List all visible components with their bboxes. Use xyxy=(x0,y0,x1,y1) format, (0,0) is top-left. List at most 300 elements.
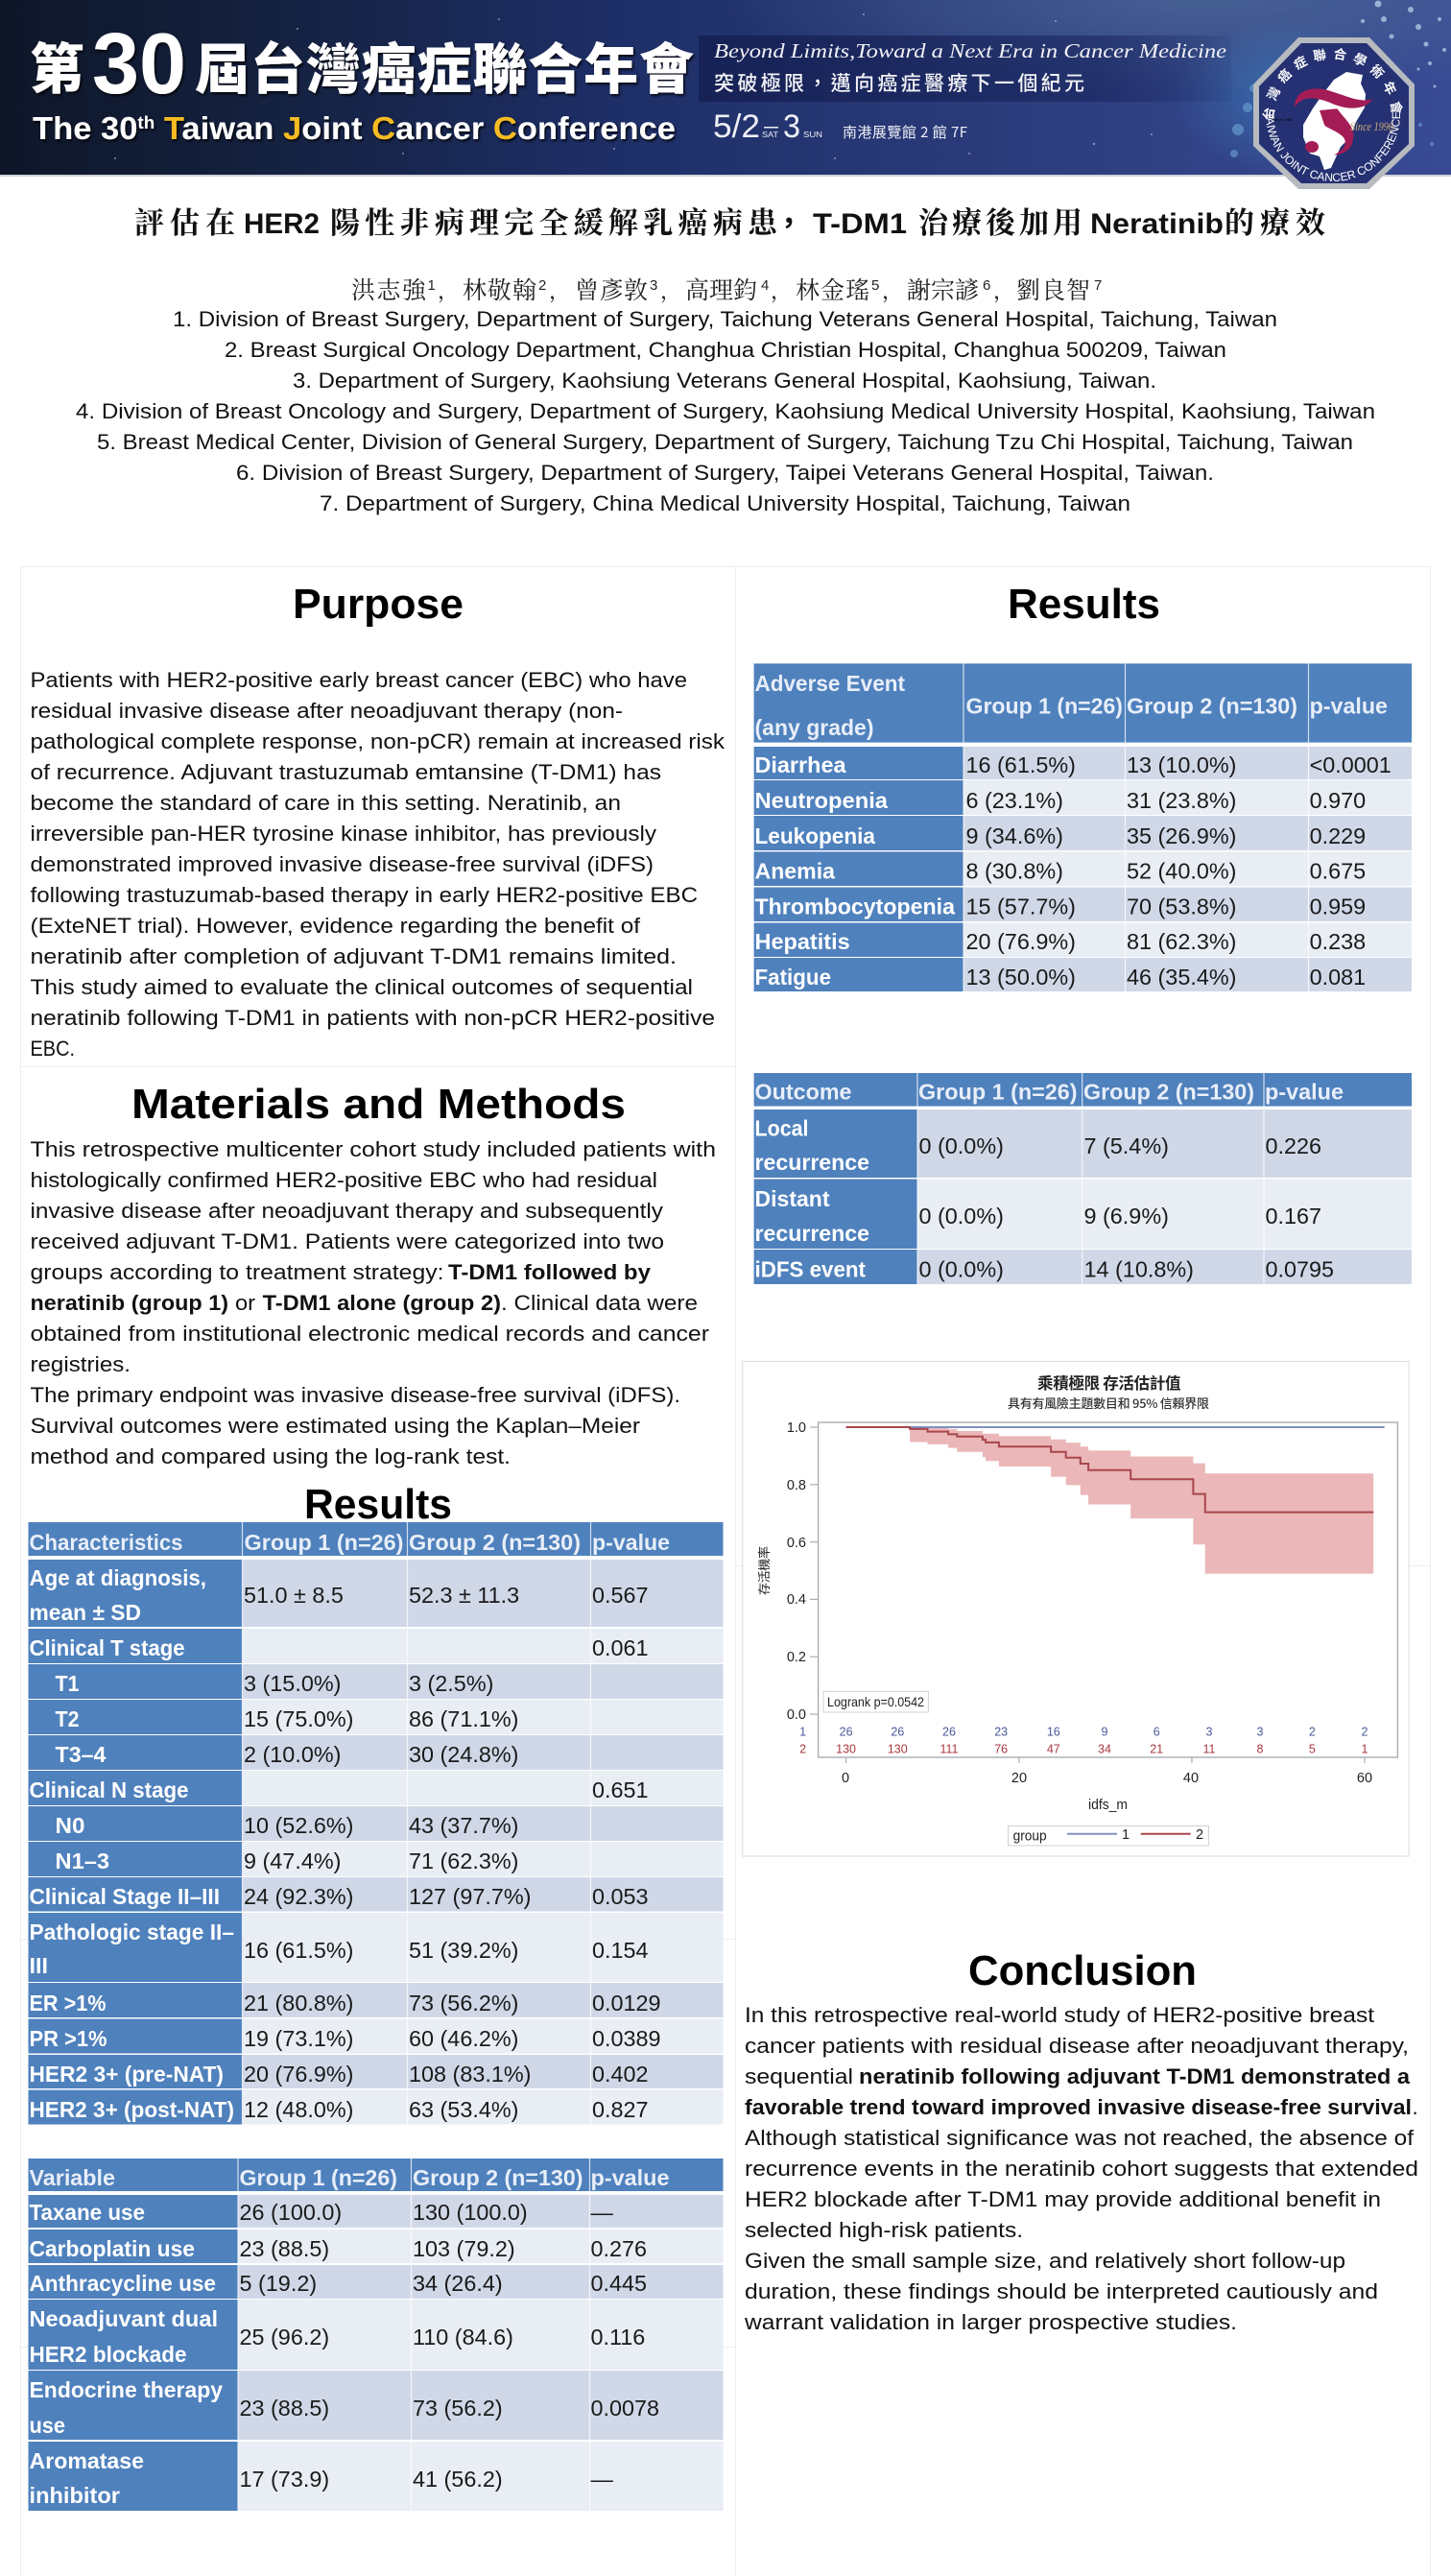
date and venue: SUN xyxy=(803,130,822,139)
number at risk: group 2: 47 xyxy=(1047,1743,1060,1756)
table: baseline characteristics: Age at diagnosis, xyxy=(29,1565,206,1590)
table: treatment variables: Neoadjuvant dual xyxy=(29,2306,218,2331)
number at risk: group 1: 2 xyxy=(1362,1726,1368,1739)
plot axes: 0.4 xyxy=(787,1592,806,1608)
table: outcomes: Group 1 (n=26) xyxy=(918,1079,1078,1104)
table: treatment variables: Variable xyxy=(29,2165,115,2190)
number at risk: group 1: 6 xyxy=(1154,1726,1160,1739)
text block: methods: The primary endpoint was invasive disease-free survival (iDFS). xyxy=(31,1383,680,1407)
slogan box: Beyond Limits,Toward a Next Era in Cancer Medicine xyxy=(714,39,1226,62)
table: outcomes: 14 (10.8%) xyxy=(1084,1257,1194,1282)
plot axes: 1.0 xyxy=(787,1420,806,1436)
text block: methods: . Clinical data were xyxy=(501,1291,698,1315)
text block: conclusion: favorable trend toward improved invasive disease-free survival xyxy=(745,2095,1412,2119)
authors: 劉良智 xyxy=(1016,272,1090,306)
affiliations: 2. Breast Surgical Oncology Department, Changhua Christian Hospital, Changhua 500209, Taiwan xyxy=(225,338,1226,362)
chart title: 具有有風險主題數目和 95% 信賴界限 xyxy=(1008,1394,1209,1412)
table: baseline characteristics: 63 (53.4%) xyxy=(409,2097,518,2122)
table: treatment variables: 73 (56.2) xyxy=(413,2396,503,2421)
table: baseline characteristics: 20 (76.9%) xyxy=(244,2062,353,2087)
main Chinese conference title xyxy=(30,16,694,112)
authors: 林敬翰 xyxy=(463,272,536,306)
table: outcomes: 0 (0.0%) xyxy=(919,1133,1004,1158)
plot axes: 20 xyxy=(1011,1771,1027,1786)
English conference title: The 30 xyxy=(33,110,133,146)
logrank callout xyxy=(823,1691,928,1712)
heading: purpose: Purpose xyxy=(293,581,464,628)
number at risk: group 1: 26 xyxy=(891,1726,904,1739)
table: baseline characteristics: 0.827 xyxy=(592,2097,649,2122)
table: adverse events: Leukopenia xyxy=(754,823,875,848)
affiliations: 4. Division of Breast Oncology and Surgery, Department of Surgery, Kaohsiung Medical University Hospital, Kaohsiung, Taiwan xyxy=(76,399,1375,423)
table: treatment variables: Taxane use xyxy=(29,2200,145,2225)
number at risk: group 1: 3 xyxy=(1257,1726,1264,1739)
plot axes xyxy=(754,1420,1397,1813)
table: adverse events: 81 (62.3%) xyxy=(1127,929,1236,954)
text block: methods: This retrospective multicenter cohort study included patients with xyxy=(31,1137,716,1161)
table: baseline characteristics: 0.402 xyxy=(592,2062,649,2087)
table: baseline characteristics xyxy=(29,1522,724,2125)
table: baseline characteristics: mean ± SD xyxy=(29,1600,141,1625)
authors: 洪志強 xyxy=(351,272,427,306)
table: treatment variables: 23 (88.5) xyxy=(240,2236,329,2261)
table: outcomes: 9 (6.9%) xyxy=(1084,1204,1169,1228)
table: adverse events: 8 (30.8%) xyxy=(965,858,1063,883)
table: baseline characteristics: 108 (83.1%) xyxy=(409,2062,531,2087)
table: treatment variables xyxy=(29,2159,724,2511)
authors: ， xyxy=(549,275,570,305)
table: baseline characteristics: 0.061 xyxy=(592,1635,649,1660)
table: baseline characteristics: HER2 3+ (pre-NAT) xyxy=(29,2062,224,2087)
number at risk: group 1: 16 xyxy=(1047,1726,1060,1739)
chart legend: group xyxy=(1013,1829,1047,1845)
logo: Taiwan Joint Cancer Conference xyxy=(1253,37,1415,189)
number at risk: group 1: 23 xyxy=(994,1726,1008,1739)
table: adverse events: (any grade) xyxy=(754,715,873,740)
table: treatment variables: 0.276 xyxy=(591,2236,647,2261)
table: adverse events: 6 (23.1%) xyxy=(965,788,1063,813)
number at risk: group 1: 26 xyxy=(942,1726,956,1739)
poster title: Neratinib xyxy=(1090,208,1224,240)
table: treatment variables: 130 (100.0) xyxy=(413,2200,528,2225)
table: baseline characteristics: 43 (37.7%) xyxy=(409,1813,518,1838)
poster title: 評估在 xyxy=(134,199,235,242)
text block: methods: invasive disease after neoadjuvant therapy and subsequently xyxy=(31,1199,664,1223)
text block: conclusion: sequential xyxy=(745,2064,853,2088)
table: adverse events: 0.238 xyxy=(1310,929,1366,954)
text block: purpose: Patients with HER2-positive early breast cancer (EBC) who have xyxy=(31,668,687,692)
table: adverse events: 70 (53.8%) xyxy=(1127,894,1236,919)
table: adverse events: 31 (23.8%) xyxy=(1127,788,1236,813)
text block: purpose xyxy=(31,668,726,1061)
table: treatment variables: — xyxy=(591,2467,614,2492)
English conference title: th xyxy=(137,113,155,132)
table: baseline characteristics: 0.0129 xyxy=(592,1991,661,2015)
survival curve: group 2 xyxy=(846,1427,1373,1513)
table: baseline characteristics: 9 (47.4%) xyxy=(244,1849,341,1873)
text block: methods: received adjuvant T-DM1. Patients were categorized into two xyxy=(31,1229,664,1253)
table: treatment variables: p-value xyxy=(591,2165,670,2190)
table: baseline characteristics: 0.0389 xyxy=(592,2026,661,2051)
table: treatment variables: 0.0078 xyxy=(591,2396,659,2421)
table: treatment variables: 103 (79.2) xyxy=(413,2236,515,2261)
table: adverse events xyxy=(754,663,1412,991)
table: treatment variables: 5 (19.2) xyxy=(240,2271,317,2296)
table: baseline characteristics: 2 (10.0%) xyxy=(244,1742,341,1767)
plot axes: 存活機率 xyxy=(754,1546,773,1595)
text block: methods: T-DM1 alone (group 2) xyxy=(263,1291,501,1315)
table: treatment variables: 34 (26.4) xyxy=(413,2271,503,2296)
number at risk: group 2: 11 xyxy=(1203,1743,1216,1756)
table: treatment variables: 0.445 xyxy=(591,2271,647,2296)
authors xyxy=(351,272,1102,306)
table: treatment variables: Carboplatin use xyxy=(29,2236,195,2261)
plot axes: 0 xyxy=(842,1771,849,1786)
number at risk: group 2: 8 xyxy=(1257,1743,1264,1756)
plot axes: idfs_m xyxy=(1088,1798,1128,1813)
number at risk: group 1: 26 xyxy=(840,1726,853,1739)
table: outcomes: p-value xyxy=(1265,1079,1344,1104)
table: baseline characteristics: 3 (2.5%) xyxy=(409,1671,493,1696)
table: baseline characteristics: Clinical T stage xyxy=(29,1635,184,1660)
table: adverse events: <0.0001 xyxy=(1310,752,1392,777)
table: baseline characteristics: 21 (80.8%) xyxy=(244,1991,353,2015)
text block: purpose: neratinib after completion of adjuvant T-DM1 remains limited. xyxy=(31,944,677,968)
text block: purpose: demonstrated improved invasive disease-free survival (iDFS) xyxy=(31,852,654,876)
authors: 6 xyxy=(983,277,990,294)
chart legend: 2 xyxy=(1196,1827,1203,1843)
authors: 曾彥敦 xyxy=(575,272,648,306)
logo: Taiwan Joint Cancer Conference: 台灣癌症聯合學術年會 xyxy=(1262,48,1403,119)
authors: ， xyxy=(771,275,792,305)
poster title: HER2 xyxy=(244,208,320,240)
table: adverse events: 0.229 xyxy=(1310,823,1366,848)
table: adverse events: 15 (57.7%) xyxy=(965,894,1076,919)
table: baseline characteristics: Clinical N stage xyxy=(29,1777,188,1802)
number at risk: group 2: 130 xyxy=(836,1743,856,1756)
poster title: ， xyxy=(774,200,803,242)
poster title: 陽性非病理完全緩解乳癌病患 xyxy=(330,199,779,242)
chart title: 乘積極限 存活估計值 xyxy=(1037,1371,1180,1394)
table: adverse events: 0.675 xyxy=(1310,858,1366,883)
table: baseline characteristics: 16 (61.5%) xyxy=(244,1938,353,1963)
panel: purpose xyxy=(31,581,726,1061)
panel: conclusion xyxy=(744,1947,1418,2334)
plot axes: 0.8 xyxy=(787,1478,806,1493)
chart: Kaplan-Meier survival estimate xyxy=(743,1361,1409,1856)
English conference title: Taiwan Joint Cancer Conference xyxy=(164,110,669,146)
heading: materials and methods: Materials and Methods xyxy=(131,1081,626,1128)
table: adverse events: 20 (76.9%) xyxy=(965,929,1076,954)
number at risk: group 2: 130 xyxy=(888,1743,908,1756)
number at risk: group 2 xyxy=(799,1743,1368,1756)
table: adverse events: 52 (40.0%) xyxy=(1127,858,1236,883)
table: treatment variables: 26 (100.0) xyxy=(240,2200,342,2225)
heading: results (left): Results xyxy=(304,1481,452,1528)
plot axes: 40 xyxy=(1183,1771,1199,1786)
table: baseline characteristics: 51 (39.2%) xyxy=(409,1938,518,1963)
text block: methods: registries. xyxy=(31,1352,131,1376)
heading: results (right): Results xyxy=(1008,581,1160,628)
table: adverse events: Group 1 (n=26) xyxy=(965,694,1123,719)
table: baseline characteristics: ER >1% xyxy=(29,1991,106,2015)
text block: purpose: neratinib following T-DM1 in patients with non-pCR HER2-positive xyxy=(31,1006,715,1030)
number at risk: group 1: 3 xyxy=(1206,1726,1213,1739)
plot axes: 0.0 xyxy=(787,1707,806,1723)
authors: 謝宗諺 xyxy=(907,272,979,306)
text block: purpose: become the standard of care in this setting. Neratinib, an xyxy=(31,791,621,815)
heading: conclusion: Conclusion xyxy=(968,1947,1197,1994)
plot axes: 0.2 xyxy=(787,1650,806,1665)
poster title xyxy=(134,199,1325,242)
table: outcomes: recurrence xyxy=(754,1150,869,1175)
poster title: T-DM1 xyxy=(813,208,907,240)
date and venue: 南港展覽館 2 館 7F xyxy=(843,122,967,142)
authors: 7 xyxy=(1094,277,1102,294)
table: baseline characteristics: 30 (24.8%) xyxy=(409,1742,518,1767)
authors: 林金瑤 xyxy=(796,272,869,306)
number at risk: group 2: 1 xyxy=(1362,1743,1368,1756)
text block: purpose: following trastuzumab-based therapy in early HER2-positive EBC xyxy=(31,883,698,907)
text block: conclusion: cancer patients with residual disease after neoadjuvant therapy, xyxy=(745,2034,1409,2058)
table: treatment variables: 0.116 xyxy=(591,2325,645,2349)
affiliations xyxy=(76,307,1375,515)
affiliations: 1. Division of Breast Surgery, Department of Surgery, Taichung Veterans General Hospital, Taichung, Taiwan xyxy=(173,307,1277,331)
table: treatment variables: — xyxy=(591,2200,614,2225)
authors: 2 xyxy=(538,277,546,294)
logo: Taiwan Joint Cancer Conference: Since 1996 xyxy=(1273,117,1293,122)
text block: conclusion: warrant validation in larger prospective studies. xyxy=(744,2310,1237,2334)
number at risk: group 2: 2 xyxy=(799,1743,806,1756)
number at risk: group 2: 34 xyxy=(1098,1743,1111,1756)
number at risk: group 1: 1 xyxy=(799,1726,806,1739)
table: outcomes: iDFS event xyxy=(754,1257,866,1282)
table: treatment variables: 17 (73.9) xyxy=(240,2467,329,2492)
table: adverse events: 13 (10.0%) xyxy=(1127,752,1236,777)
affiliations: 3. Department of Surgery, Kaohsiung Veterans General Hospital, Kaohsiung, Taiwan. xyxy=(293,369,1156,393)
affiliations: 7. Department of Surgery, China Medical University Hospital, Taichung, Taiwan xyxy=(320,491,1130,515)
table: treatment variables: Anthracycline use xyxy=(29,2271,216,2296)
table: baseline characteristics: 127 (97.7%) xyxy=(409,1884,531,1909)
date and venue xyxy=(713,108,967,145)
authors: ， xyxy=(993,275,1014,305)
table: baseline characteristics: 12 (48.0%) xyxy=(244,2097,353,2122)
poster title: 治療後加用 xyxy=(918,199,1082,242)
table: adverse events: 13 (50.0%) xyxy=(965,965,1076,990)
date and venue: 5/2 xyxy=(713,108,760,145)
table: treatment variables: use xyxy=(29,2413,65,2438)
authors: ， xyxy=(882,275,903,305)
table: treatment variables: Group 1 (n=26) xyxy=(240,2165,397,2190)
table: outcomes: 0 (0.0%) xyxy=(919,1257,1004,1282)
text block: methods xyxy=(31,1137,716,1468)
number at risk: group 2: 111 xyxy=(940,1743,959,1756)
text block: conclusion: . xyxy=(1413,2095,1418,2119)
table: treatment variables: 25 (96.2) xyxy=(240,2325,329,2349)
logo: Taiwan Joint Cancer Conference: Since 1996 xyxy=(1350,119,1393,133)
table: baseline characteristics: HER2 3+ (post-NAT) xyxy=(29,2097,234,2122)
table: treatment variables: inhibitor xyxy=(29,2483,120,2508)
text block: methods: or xyxy=(235,1291,256,1315)
logo: Taiwan Joint Cancer Conference: TAIWAN JOINT CANCER CONFERENCE xyxy=(1266,111,1400,181)
slogan box: 突破極限，邁向癌症醫療下一個紀元 xyxy=(714,68,1084,97)
authors: 4 xyxy=(761,277,769,294)
table: adverse events: Diarrhea xyxy=(754,752,846,777)
chart legend: 1 xyxy=(1122,1827,1130,1843)
table: adverse events: Neutropenia xyxy=(754,788,888,813)
table: outcomes: 0.0795 xyxy=(1265,1257,1334,1282)
table: adverse events: 46 (35.4%) xyxy=(1127,965,1236,990)
table: baseline characteristics: p-value xyxy=(592,1530,670,1555)
authors: 高理鈞 xyxy=(685,272,757,306)
number at risk: group 2: 76 xyxy=(994,1743,1008,1756)
text block: purpose: (ExteNET trial). However, evidence regarding the benefit of xyxy=(31,914,641,938)
authors: 1 xyxy=(428,277,436,294)
table: outcomes xyxy=(754,1073,1412,1284)
table: outcomes: Group 2 (n=130) xyxy=(1083,1079,1254,1104)
table: outcomes: 0.167 xyxy=(1265,1204,1321,1228)
table: baseline characteristics: T1 xyxy=(56,1671,80,1696)
table: baseline characteristics: 52.3 ± 11.3 xyxy=(409,1583,519,1608)
table: adverse events: 9 (34.6%) xyxy=(965,823,1063,848)
table: baseline characteristics: Pathologic stage II– xyxy=(29,1920,234,1944)
table: adverse events: 16 (61.5%) xyxy=(965,752,1076,777)
logrank callout: Logrank p=0.0542 xyxy=(827,1694,924,1709)
authors: 5 xyxy=(871,277,879,294)
main Chinese conference title: 屆台灣癌症聯合年會 xyxy=(195,26,694,105)
text block: purpose: This study aimed to evaluate the clinical outcomes of sequential xyxy=(31,975,693,999)
table: baseline characteristics: 15 (75.0%) xyxy=(244,1706,353,1731)
text block: methods: obtained from institutional electronic medical records and cancer xyxy=(31,1322,710,1346)
table: baseline characteristics: 73 (56.2%) xyxy=(409,1991,518,2015)
authors: 3 xyxy=(650,277,657,294)
main Chinese conference title: 第 xyxy=(30,26,84,105)
table: baseline characteristics: III xyxy=(29,1953,48,1978)
text block: purpose: EBC. xyxy=(31,1037,75,1061)
date and venue: 3 xyxy=(783,108,800,145)
table: treatment variables: Aromatase xyxy=(29,2448,144,2473)
table: baseline characteristics: 51.0 ± 8.5 xyxy=(244,1583,344,1608)
table: baseline characteristics: PR >1% xyxy=(29,2026,107,2051)
text block: conclusion: HER2 blockade after T-DM1 may provide additional benefit in xyxy=(745,2187,1381,2211)
text block: conclusion: Given the small sample size, and relatively short follow-up xyxy=(745,2249,1345,2273)
table: baseline characteristics: 0.651 xyxy=(592,1777,649,1802)
table: adverse events: Hepatitis xyxy=(754,929,850,954)
table: baseline characteristics: 60 (46.2%) xyxy=(409,2026,518,2051)
table: baseline characteristics: 24 (92.3%) xyxy=(244,1884,353,1909)
table: baseline characteristics: N1–3 xyxy=(56,1849,109,1873)
table: treatment variables: HER2 blockade xyxy=(29,2342,186,2367)
number at risk: group 2: 5 xyxy=(1309,1743,1316,1756)
table: outcomes: 0 (0.0%) xyxy=(919,1204,1004,1228)
table: treatment variables: Endocrine therapy xyxy=(29,2377,223,2402)
chart legend xyxy=(1008,1825,1208,1846)
table: adverse events: 35 (26.9%) xyxy=(1127,823,1236,848)
table: treatment variables: 110 (84.6) xyxy=(413,2325,513,2349)
number at risk: group 1: 9 xyxy=(1102,1726,1108,1739)
text block: purpose: irreversible pan-HER tyrosine kinase inhibitor, has previously xyxy=(31,822,657,846)
conference banner xyxy=(0,0,1451,177)
text block: methods: T-DM1 followed by xyxy=(448,1260,652,1284)
table: adverse events: Anemia xyxy=(754,858,835,883)
table: treatment variables: 41 (56.2) xyxy=(413,2467,503,2492)
table: baseline characteristics: T2 xyxy=(56,1706,79,1731)
table: baseline characteristics: N0 xyxy=(56,1813,84,1838)
table: baseline characteristics: Group 1 (n=26) xyxy=(244,1530,403,1555)
date and venue: SAT xyxy=(762,130,778,139)
table: adverse events: 0.959 xyxy=(1310,894,1366,919)
text block: methods: Survival outcomes were estimated using the Kaplan–Meier xyxy=(31,1414,641,1438)
text block: purpose: pathological complete response, non-pCR) remain at increased risk xyxy=(31,729,726,753)
poster title: 的療效 xyxy=(1225,199,1325,242)
table: baseline characteristics: Characteristics xyxy=(29,1530,182,1555)
chart title xyxy=(1008,1371,1209,1412)
table: baseline characteristics: Clinical Stage II–III xyxy=(29,1884,220,1909)
affiliations: 6. Division of Breast Surgery, Department of Surgery, Taipei Veterans General Hospital, Taiwan. xyxy=(236,461,1214,485)
95% confidence band xyxy=(910,1427,1373,1574)
table: outcomes: 0.226 xyxy=(1265,1133,1321,1158)
plot axes: 0.6 xyxy=(787,1536,806,1551)
text block: conclusion: In this retrospective real-world study of HER2-positive breast xyxy=(745,2003,1375,2027)
table: adverse events: Group 2 (n=130) xyxy=(1127,694,1297,719)
table: treatment variables: 23 (88.5) xyxy=(240,2396,329,2421)
table: baseline characteristics: Group 2 (n=130) xyxy=(409,1530,581,1555)
table: baseline characteristics: 71 (62.3%) xyxy=(409,1849,518,1873)
text block: conclusion: Although statistical significance was not reached, the absence of xyxy=(745,2126,1415,2150)
table: adverse events: 0.081 xyxy=(1310,965,1366,990)
survival curve: group 1 xyxy=(846,1426,1385,1428)
panel: materials and methods xyxy=(31,1081,716,1468)
table: baseline characteristics: 10 (52.6%) xyxy=(244,1813,353,1838)
text block: purpose: of recurrence. Adjuvant trastuzumab emtansine (T-DM1) has xyxy=(31,760,661,784)
slogan box xyxy=(699,36,1231,102)
text block: methods: method and compared using the log-rank test. xyxy=(31,1444,511,1468)
table: outcomes: Outcome xyxy=(754,1079,852,1104)
text block: methods: neratinib (group 1) xyxy=(31,1291,228,1315)
affiliations: 5. Breast Medical Center, Division of General Surgery, Department of Surgery, Taichung Tzu Chi Hospital, Taichung, Taiwan xyxy=(97,430,1353,454)
text block: conclusion: recurrence events in the neratinib cohort suggests that extended xyxy=(745,2157,1418,2181)
text block: conclusion: neratinib following adjuvant T-DM1 demonstrated a xyxy=(859,2064,1411,2088)
number at risk: group 2: 21 xyxy=(1150,1743,1163,1756)
number at risk: group 1: 2 xyxy=(1309,1726,1316,1739)
table: treatment variables: Group 2 (n=130) xyxy=(413,2165,583,2190)
text block: methods: groups according to treatment strategy: xyxy=(31,1260,443,1284)
table: outcomes: Local xyxy=(754,1115,808,1140)
plot axes: 60 xyxy=(1357,1771,1372,1786)
table: baseline characteristics: 0.053 xyxy=(592,1884,649,1909)
table: baseline characteristics: 19 (73.1%) xyxy=(244,2026,353,2051)
text block: conclusion xyxy=(744,2003,1418,2334)
table: baseline characteristics: T3–4 xyxy=(56,1742,107,1767)
table: adverse events: Adverse Event xyxy=(754,671,905,696)
authors: ， xyxy=(660,275,681,305)
text block: conclusion: selected high-risk patients. xyxy=(745,2218,1023,2242)
table: adverse events: p-value xyxy=(1310,694,1388,719)
table: outcomes: recurrence xyxy=(754,1221,869,1246)
text block: conclusion: duration, these findings should be interpreted cautiously and xyxy=(745,2279,1378,2303)
text block: methods: histologically confirmed HER2-positive EBC who had residual xyxy=(31,1168,657,1192)
table: adverse events: Fatigue xyxy=(754,965,831,990)
table: baseline characteristics: 3 (15.0%) xyxy=(244,1671,341,1696)
table: outcomes: Distant xyxy=(754,1186,830,1211)
table: outcomes: 7 (5.4%) xyxy=(1084,1133,1169,1158)
table: baseline characteristics: 0.567 xyxy=(592,1583,649,1608)
table: adverse events: Thrombocytopenia xyxy=(754,894,955,919)
table: baseline characteristics: 86 (71.1%) xyxy=(409,1706,518,1731)
table: baseline characteristics: 0.154 xyxy=(592,1938,649,1963)
number at risk: group 1 xyxy=(799,1726,1368,1739)
table: adverse events: 0.970 xyxy=(1310,788,1366,813)
